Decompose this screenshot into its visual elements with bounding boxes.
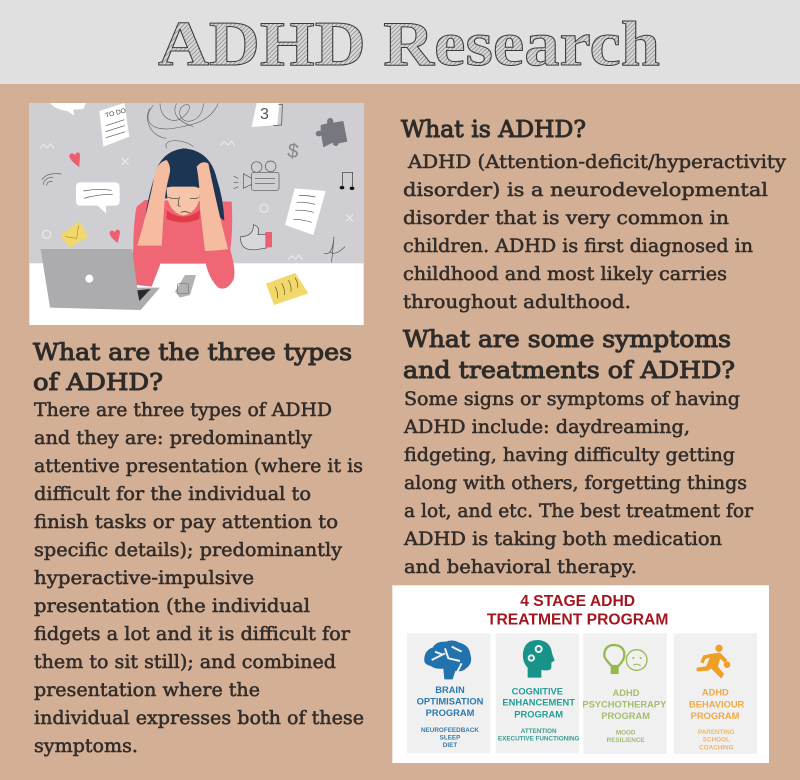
icon: puzzle piece — [316, 118, 347, 147]
text block: symptoms and treatments: along with others, forgetting things — [404, 473, 747, 494]
card: behaviour: SCHOOL — [703, 737, 730, 744]
icon: film camera — [234, 161, 279, 190]
icon: dollar: $ — [286, 140, 300, 163]
card: behaviour: ADHD — [702, 688, 729, 698]
text block: three types of ADHD: presentation where the — [34, 680, 260, 701]
icon: head with gears — [523, 640, 555, 678]
icon: signature — [324, 237, 345, 263]
card: cognitive enhancement: ATTENTION — [521, 728, 557, 735]
text block: symptoms and treatments: ADHD is taking both medication — [403, 529, 722, 550]
icon: light bulb and face — [604, 645, 647, 674]
text block: what is ADHD — [403, 152, 787, 313]
card: psychotherapy: ADHD — [613, 688, 640, 698]
icon: yellow sticky note — [266, 273, 308, 305]
heading: what are the three types: What are the three types — [33, 338, 352, 366]
heading: symptoms and treatments — [403, 325, 735, 384]
panel heading — [487, 593, 668, 629]
illustration: stressed woman at laptop — [29, 103, 364, 325]
text block: three types of ADHD: presentation (the individual — [34, 596, 310, 617]
card: behaviour — [674, 633, 757, 754]
card: brain optimisation: PROGRAM — [426, 708, 475, 718]
heading: what is ADHD: What is ADHD? — [401, 115, 586, 143]
text block: three types of ADHD: fidgets a lot and it is difficult for — [34, 624, 350, 645]
text block: symptoms and treatments: a lot, and etc. The best treatment for — [404, 501, 753, 522]
card: brain optimisation: SLEEP — [440, 735, 460, 742]
card: psychotherapy: RESILIENCE — [607, 737, 645, 744]
icon: yellow envelope — [60, 222, 88, 248]
text block: symptoms and treatments: ADHD include: daydreaming, — [403, 417, 690, 438]
title: ADHD Research — [158, 8, 660, 79]
text block: symptoms and treatments — [403, 389, 753, 578]
text block: three types of ADHD: symptoms. — [34, 736, 138, 757]
card: psychotherapy: PROGRAM — [601, 711, 650, 721]
icon: calendar — [252, 103, 282, 127]
card: behaviour: BEHAVIOUR — [689, 699, 745, 709]
card: brain optimisation: OPTIMISATION — [417, 697, 484, 707]
text block: three types of ADHD: and they are: predominantly — [34, 428, 313, 449]
text block: three types of ADHD — [34, 400, 364, 757]
card: cognitive enhancement — [496, 633, 580, 753]
text block: what is ADHD: throughout adulthood. — [403, 292, 631, 313]
icon: running figure with ball — [697, 645, 730, 679]
card: brain optimisation — [407, 633, 490, 753]
text block: symptoms and treatments: fidgeting, having difficulty getting — [404, 445, 735, 466]
card: psychotherapy — [582, 633, 667, 754]
icon: speech bubble top-left — [50, 103, 86, 116]
icon: paper note — [285, 188, 326, 235]
panel: 4 stage treatment program — [392, 585, 769, 763]
text block: what is ADHD: ADHD (Attention-deficit/hyperactivity — [407, 152, 787, 173]
card: cognitive enhancement: EXECUTIVE FUNCTIONING — [498, 736, 580, 743]
text block: three types of ADHD: individual expresses both of these — [34, 708, 364, 729]
decorative marks — [40, 141, 353, 260]
card: cognitive enhancement: PROGRAM — [514, 709, 563, 719]
card: psychotherapy: MOOD — [616, 730, 636, 737]
text block: what is ADHD: disorder) is a neurodevelopmental — [403, 180, 768, 201]
text block: three types of ADHD: There are three types of ADHD — [34, 400, 332, 421]
text block: three types of ADHD: them to sit still); and combined — [34, 652, 336, 673]
text block: three types of ADHD: hyperactive-impulsive — [34, 568, 254, 589]
panel heading: 4 STAGE ADHD — [520, 593, 635, 610]
icon: hearts — [69, 152, 120, 243]
text block: three types of ADHD: specific details); predominantly — [34, 540, 343, 561]
card: psychotherapy: PSYCHOTHERAPY — [582, 699, 667, 709]
text block: what is ADHD: children. ADHD is first diagnosed in — [403, 236, 753, 257]
card: cognitive enhancement: ENHANCEMENT — [502, 698, 575, 708]
heading: symptoms and treatments: What are some symptoms — [403, 325, 731, 353]
text block: three types of ADHD: finish tasks or pay attention to — [34, 512, 338, 533]
card: brain optimisation: NEUROFEEDBACK — [421, 727, 479, 734]
card: behaviour: COACHING — [699, 744, 734, 751]
text block: symptoms and treatments: Some signs or symptoms of having — [404, 389, 740, 410]
card: behaviour: PARENTING — [698, 729, 735, 736]
icon: brain — [424, 641, 471, 679]
icon: wifi — [42, 174, 62, 186]
panel heading: TREATMENT PROGRAM — [487, 612, 668, 629]
card: brain optimisation: DIET — [443, 742, 457, 749]
card: brain optimisation: BRAIN — [435, 685, 465, 695]
text block: three types of ADHD: difficult for the individual to — [34, 484, 311, 505]
icon: speech bubble — [76, 182, 120, 214]
heading: what are the three types — [33, 338, 352, 396]
card: cognitive enhancement: COGNITIVE — [512, 686, 563, 696]
icon: calendar: 3 — [260, 106, 269, 123]
icon: thumbs up — [241, 225, 272, 250]
header band — [0, 0, 800, 84]
icon: to-do note: TO DO — [105, 107, 127, 120]
text block: what is ADHD: disorder that is very common in — [403, 208, 729, 229]
laptop — [41, 249, 160, 310]
text block: three types of ADHD: attentive presentation (where it is — [34, 456, 363, 477]
icon: music notes — [340, 172, 354, 190]
text block: what is ADHD: childhood and most likely carries — [403, 264, 727, 285]
heading: what are the three types: of ADHD? — [33, 368, 163, 396]
text block: symptoms and treatments: and behavioral therapy. — [404, 557, 637, 578]
icon: phone — [175, 275, 196, 298]
icon: tangled scribble — [147, 103, 218, 148]
icon: to-do note — [99, 103, 129, 147]
woman — [132, 148, 234, 289]
heading: symptoms and treatments: and treatments of ADHD? — [403, 356, 735, 384]
card: behaviour: PROGRAM — [691, 711, 740, 721]
